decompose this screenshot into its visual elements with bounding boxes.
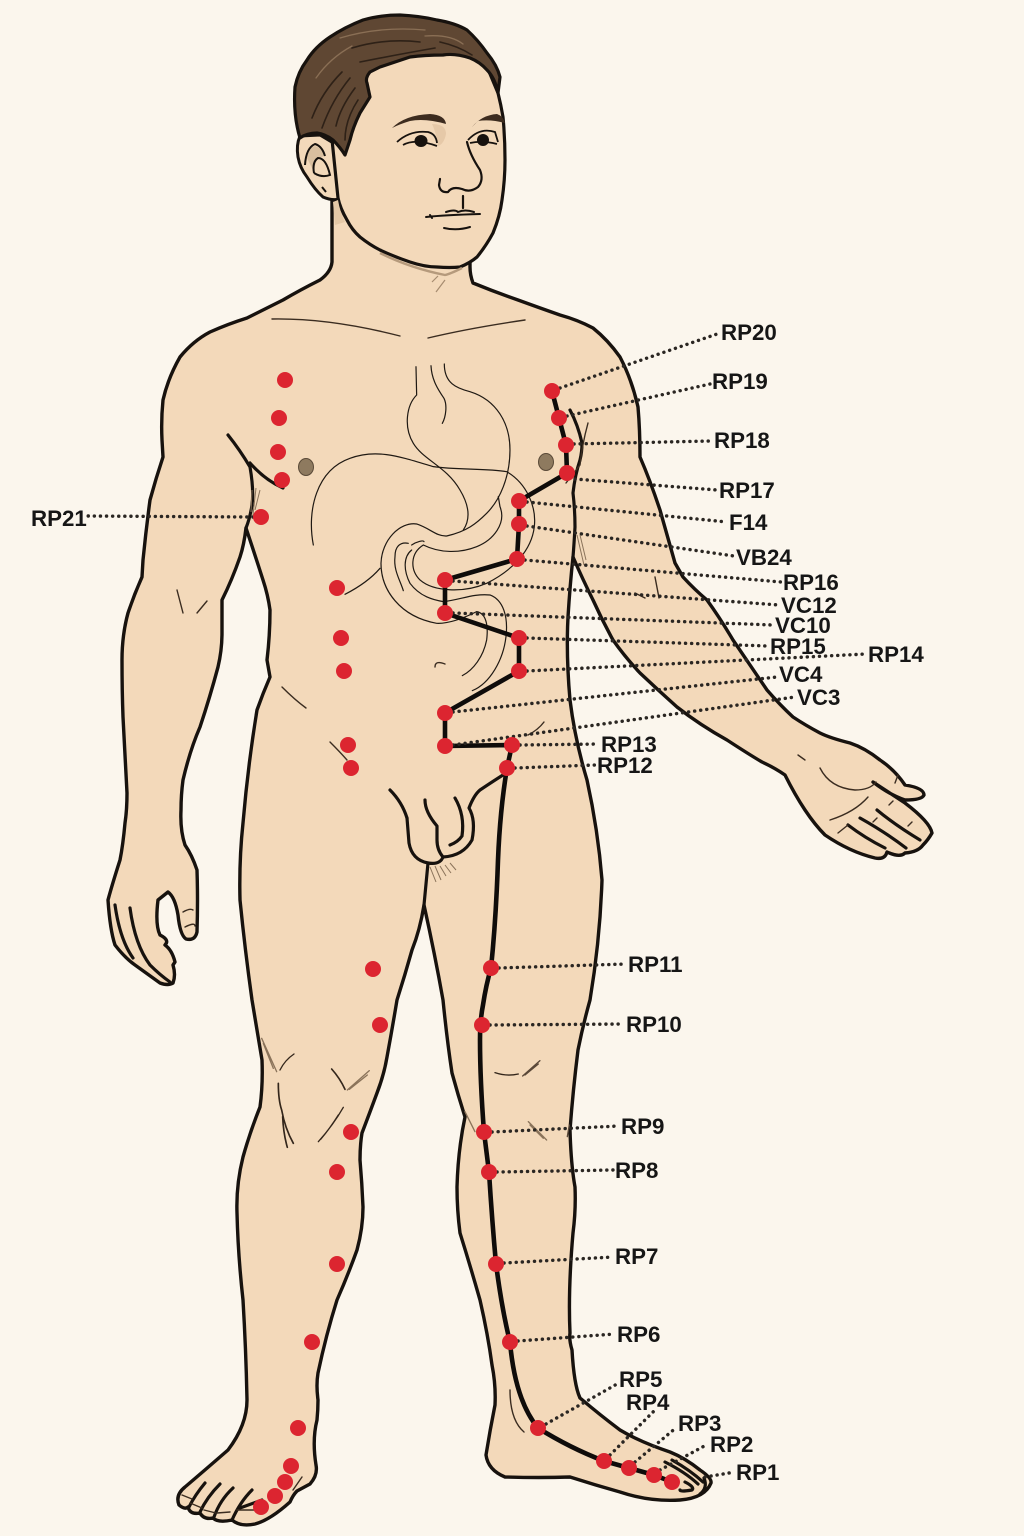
point RP9	[476, 1114, 664, 1140]
point F14	[511, 493, 768, 535]
point VC3	[437, 685, 840, 754]
point RP5	[530, 1367, 662, 1436]
nose	[439, 142, 482, 208]
point RP7	[488, 1244, 658, 1272]
internal organs	[311, 364, 535, 691]
point RP15	[511, 630, 826, 659]
body silhouette	[108, 200, 932, 1525]
gall duct	[345, 568, 380, 594]
point RP11	[483, 952, 683, 977]
liver and colon	[311, 454, 535, 590]
hand detail: closed hand	[115, 905, 195, 982]
point RP4	[596, 1390, 670, 1469]
hand detail: open hand	[820, 768, 920, 848]
point RP13	[504, 732, 657, 757]
face	[330, 50, 505, 268]
point RP16: RP16	[783, 570, 839, 595]
head	[295, 15, 505, 292]
hair strokes	[312, 29, 472, 140]
mirror acupoints on the opposite side	[253, 372, 388, 1515]
right eye	[468, 131, 498, 144]
point RP3	[621, 1411, 721, 1476]
point VC3: VC3	[797, 685, 840, 710]
foot detail: left side toes	[182, 1477, 302, 1520]
point RP7: RP7	[615, 1244, 658, 1269]
point VC4	[437, 662, 823, 721]
point RP1	[664, 1460, 779, 1490]
stomach and duodenum	[381, 364, 510, 676]
point RP17	[559, 465, 775, 503]
meridian line	[445, 391, 672, 1482]
point RP18: RP18	[714, 428, 770, 453]
point RP19: RP19	[712, 369, 768, 394]
point RP3: RP3	[678, 1411, 721, 1436]
point RP11: RP11	[628, 952, 683, 977]
point RP6: RP6	[617, 1322, 660, 1347]
point VC10	[437, 605, 831, 638]
eye socket shading	[432, 124, 446, 146]
foot detail: right side toes	[665, 1460, 705, 1494]
point RP19	[551, 369, 768, 426]
neck shadow	[380, 253, 462, 275]
point VB24: VB24	[736, 545, 792, 570]
point RP12: RP12	[597, 753, 653, 778]
point RP2: RP2	[710, 1432, 753, 1457]
point VC4: VC4	[779, 662, 823, 687]
point F14: F14	[729, 510, 768, 535]
point RP16	[509, 551, 839, 595]
body creases and inner lines	[177, 319, 805, 1432]
left eye	[397, 132, 437, 146]
point RP17: RP17	[719, 478, 775, 503]
point VC12: VC12	[781, 593, 837, 618]
intestine	[405, 550, 507, 691]
ear inner	[307, 146, 324, 172]
wavy fold	[395, 543, 408, 591]
point RP21	[31, 506, 269, 531]
body figure	[108, 200, 932, 1525]
point RP5: RP5	[619, 1367, 662, 1392]
point RP20	[544, 320, 777, 399]
stomach left wall	[407, 367, 468, 530]
point RP12	[499, 753, 653, 778]
point RP18	[558, 428, 770, 453]
point RP10: RP10	[626, 1012, 682, 1037]
point RP2	[646, 1432, 753, 1483]
point RP14: RP14	[868, 642, 924, 667]
knee creases	[262, 1038, 569, 1147]
point RP8: RP8	[615, 1158, 658, 1183]
point RP13: RP13	[601, 732, 657, 757]
nipple left	[298, 458, 314, 476]
esophagus inner	[431, 366, 446, 423]
point RP8	[481, 1158, 658, 1183]
point RP15: RP15	[770, 634, 826, 659]
genitals	[390, 775, 503, 882]
point RP10	[474, 1012, 682, 1037]
fold top	[412, 541, 424, 545]
point RP1: RP1	[736, 1460, 779, 1485]
point VC12	[437, 572, 837, 618]
point RP9: RP9	[621, 1114, 664, 1139]
point RP20: RP20	[721, 320, 777, 345]
mouth	[426, 210, 480, 229]
ear	[297, 135, 345, 200]
point VB24	[511, 516, 792, 570]
point RP21: RP21	[31, 506, 87, 531]
point RP4: RP4	[626, 1390, 670, 1415]
nipple right	[538, 454, 554, 470]
point RP6	[502, 1322, 660, 1350]
eyebrows	[392, 114, 505, 128]
point VC10: VC10	[775, 613, 831, 638]
point RP14	[511, 642, 924, 679]
hair	[295, 15, 500, 155]
